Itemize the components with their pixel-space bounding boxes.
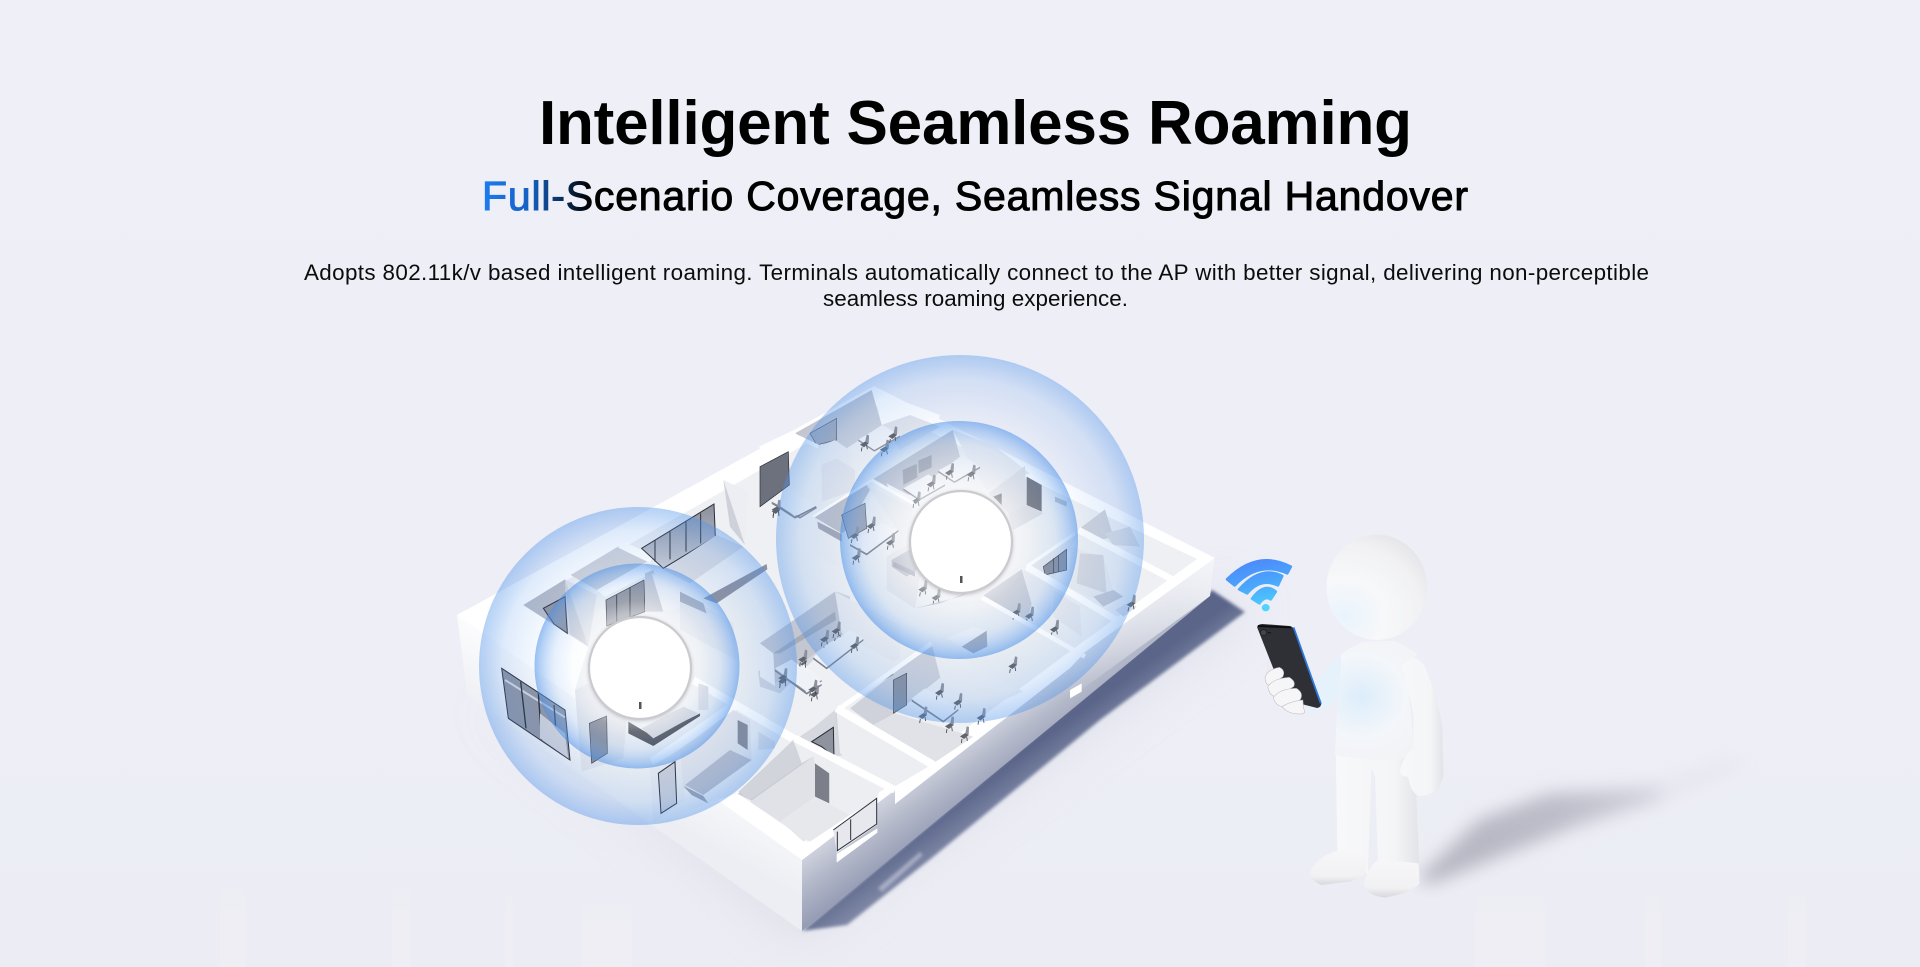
outer signal circle xyxy=(776,355,1144,723)
wireless coverage: right access point xyxy=(776,355,1144,723)
inner signal circle xyxy=(534,564,740,768)
access point device xyxy=(910,491,1012,593)
building ground shadow xyxy=(470,590,1250,940)
building top slab and floor xyxy=(457,386,1215,860)
wifi icon xyxy=(1227,560,1291,611)
title: Intelligent Seamless Roaming xyxy=(539,89,1412,158)
inner signal circle xyxy=(840,421,1078,659)
faint bottom stripes xyxy=(220,885,1806,967)
description text: seamless roaming experience. xyxy=(823,286,1128,311)
building outer walls xyxy=(457,558,1215,931)
torso xyxy=(1335,641,1418,760)
description text xyxy=(304,260,1649,311)
subtitle: Full-Scenario Coverage, Seamless Signal Handover xyxy=(482,173,1468,219)
rooms: right wing xyxy=(760,390,1173,788)
rooms: left wing xyxy=(502,480,850,842)
phone xyxy=(1257,624,1321,708)
person shadow xyxy=(1418,760,1739,885)
rooms: front corner xyxy=(738,708,933,863)
illustration: office floor plan xyxy=(457,355,1250,940)
access point device xyxy=(589,617,691,719)
wireless coverage: left access point xyxy=(479,507,797,825)
outer signal circle xyxy=(479,507,797,825)
description text: Adopts 802.11k/v based intelligent roaming. Terminals automatically connect to the AP with better signal, delivering non-perceptible xyxy=(304,260,1649,285)
head xyxy=(1326,535,1427,640)
person holding phone xyxy=(1227,535,1739,897)
rear arm and hand xyxy=(1400,658,1444,796)
front arm xyxy=(1307,657,1341,713)
hand with fingers xyxy=(1265,662,1305,714)
legs and feet xyxy=(1311,743,1420,897)
